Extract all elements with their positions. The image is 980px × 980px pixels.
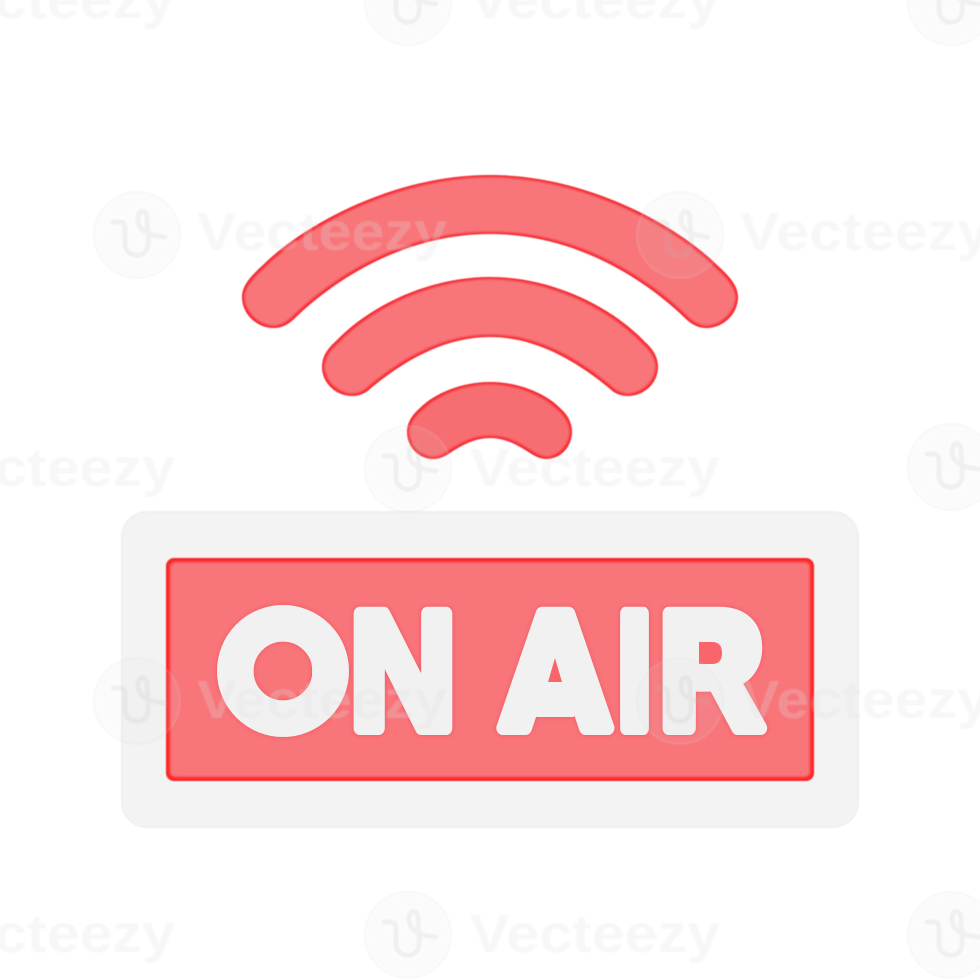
sign panel <box>121 511 859 828</box>
watermark text: Vecteezy <box>197 202 447 262</box>
on air text: O <box>226 590 340 753</box>
on air text: A <box>499 579 612 764</box>
icon: wifi signal <box>242 175 738 459</box>
red screen <box>166 558 814 781</box>
on air text: R <box>659 579 764 764</box>
sign frame <box>121 511 859 828</box>
watermark text: Vecteezy <box>740 202 980 262</box>
middle wifi arc <box>322 277 658 396</box>
watermark text: Vecteezy <box>470 438 720 498</box>
watermark text: Vecteezy <box>470 904 720 964</box>
watermark text: Vecteezy <box>197 670 447 730</box>
watermark text: Vecteezy <box>740 670 980 730</box>
on air text: N <box>350 579 456 764</box>
outer wifi arc <box>242 175 738 328</box>
inner wifi arc <box>407 382 572 459</box>
on air text: I <box>617 579 652 764</box>
on air text <box>226 579 764 764</box>
letter counters <box>548 642 722 682</box>
